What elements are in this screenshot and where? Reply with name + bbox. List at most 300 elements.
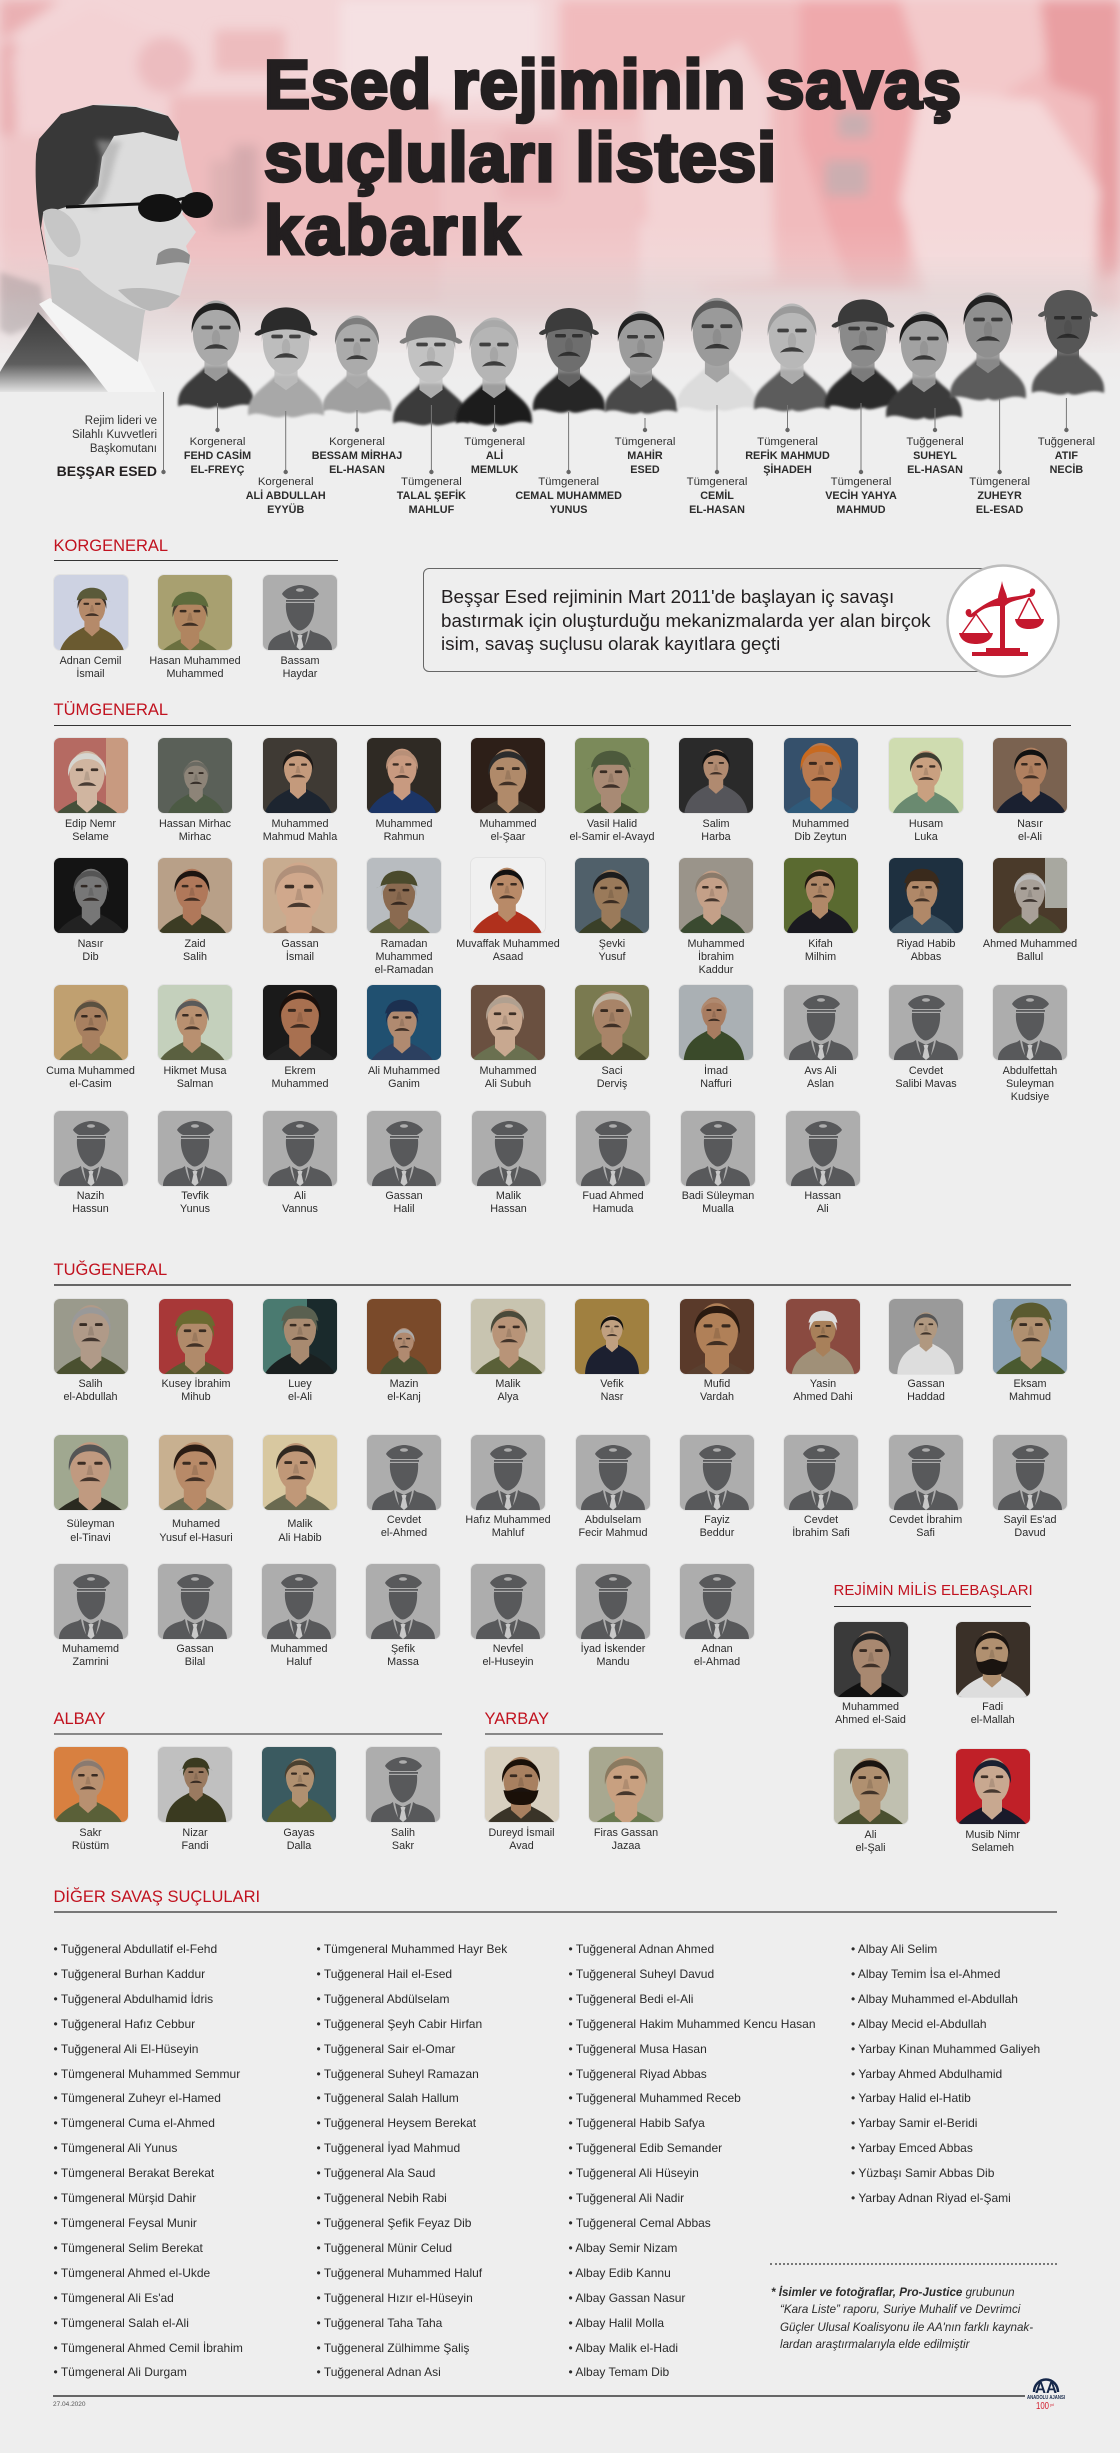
label: Cemil el-Hasan: EL-HASAN [689, 504, 745, 516]
list column 2: • Tuğgeneral Suheyl Ramazan [316, 2067, 479, 2081]
card: Firas Gassan Jazaa [589, 1747, 663, 1822]
card: Fayiz Beddur [680, 1434, 754, 1510]
text: Salih [183, 951, 207, 963]
list column 4: • Albay Ali Selim [851, 1942, 937, 1956]
card: Muhamed Yusuf el-Hasuri [159, 1434, 233, 1510]
list column 1: • Tümgeneral Berakat Berekat [54, 2166, 214, 2180]
list column 3: • Albay Edib Kannu [568, 2266, 671, 2280]
icon: scales of justice [946, 564, 1060, 678]
list column 4: • Albay Temim İsa el-Ahmed [851, 1967, 1000, 1981]
list column 2: • Tuğgeneral Abdülselam [316, 1992, 449, 2006]
list column 2: • Tuğgeneral Hail el-Esed [316, 1967, 452, 1981]
list column 1: • Tümgeneral Ali Durgam [54, 2365, 187, 2379]
list column 3: • Albay Gassan Nasur [568, 2291, 685, 2305]
text: Yusuf [598, 951, 626, 963]
text: Ekrem [284, 1064, 316, 1076]
text: Muvaffak Muhammed [456, 938, 560, 950]
label: Mahir Esed: Tümgeneral [615, 436, 675, 448]
card: Gayas Dalla [262, 1747, 336, 1822]
text: Şefik [391, 1643, 415, 1655]
label: Suheyl el-Hasan: Tuğgeneral [906, 436, 964, 448]
heading: Diğer savaş suçluları: DİĞER SAVAŞ SUÇLULARI [54, 1888, 260, 1906]
card: Muhammed Rahmun [366, 737, 442, 843]
text: Asaad [493, 951, 523, 963]
list column 4: • Albay Muhammed el-Abdullah [851, 1992, 1018, 2006]
text: Ali [294, 1190, 306, 1202]
label: Vecih Yahya Mahmud: MAHMUD [836, 504, 886, 516]
text: Avad [509, 1840, 534, 1852]
text: Sayil Es'ad [1003, 1514, 1057, 1526]
text: Safi [916, 1527, 935, 1539]
text: Muhammed [270, 1643, 328, 1655]
card: Nasır el-Ali [992, 737, 1068, 843]
text: Luka [914, 831, 938, 843]
label: Ali Abdullah Eyyüb [246, 476, 326, 516]
heading: Rejimin milis elebaşları: REJİMİN MİLİS ELEBAŞLARI [834, 1582, 1033, 1599]
text: Massa [387, 1656, 419, 1668]
label: Talal Şefik Mahluf: TALAL ŞEFİK [397, 490, 466, 502]
text: Haddad [907, 1391, 945, 1403]
list column 2: • Tuğgeneral Nebih Rabi [316, 2191, 447, 2205]
list column 2: • Tuğgeneral Münir Celud [316, 2241, 452, 2255]
card: Gassan Halil [367, 1110, 441, 1186]
text: Mirhac [179, 831, 211, 843]
text: Salibi Mavas [895, 1078, 957, 1090]
text: Fuad Ahmed [582, 1190, 644, 1202]
card: Fadi el-Mallah [956, 1622, 1030, 1696]
text: Malik [496, 1190, 521, 1202]
text: Muhammed [792, 818, 849, 830]
heading: Korgeneral: KORGENERAL [54, 537, 168, 555]
text: el-Ahmad [694, 1656, 740, 1668]
text: Kusey İbrahim [161, 1378, 230, 1390]
label: Cemal Muhammed Yunus [515, 476, 622, 516]
text: Sakr [79, 1826, 102, 1838]
text: Gassan [385, 1190, 423, 1202]
text: Abbas [911, 951, 941, 963]
list column 3: • Tuğgeneral Adnan Ahmed [568, 1942, 714, 1956]
label: Mahir Esed: ESED [630, 464, 660, 476]
text: İbrahim Safi [792, 1527, 850, 1539]
bust: Fehd Casim el-Freyc [178, 298, 254, 408]
card: Salim Harba [678, 737, 754, 843]
list column 3: • Tuğgeneral Ali Hüseyin [568, 2166, 699, 2180]
text: Abdulselam [585, 1514, 641, 1526]
card: Adnan el-Ahmad [680, 1564, 754, 1638]
list column 2: • Tuğgeneral Muhammed Haluf [316, 2266, 482, 2280]
text: Ali Subuh [485, 1078, 531, 1090]
text: İbrahim [698, 951, 734, 963]
card: Ramadan Muhammed el-Ramadan [366, 857, 442, 976]
text: Muhamed [172, 1518, 220, 1530]
card: Süleyman el-Tinavi [54, 1434, 128, 1510]
card: Malik Alya [471, 1298, 545, 1374]
card: Sakr Rüstüm [54, 1747, 128, 1822]
text: Adnan [701, 1643, 733, 1655]
card: Vefik Nasr [575, 1298, 649, 1374]
text: Aslan [807, 1078, 834, 1090]
list column 2: • Tuğgeneral Zülhimme Şaliş [316, 2340, 469, 2354]
list column 1: • Tuğgeneral Abdullatif el-Fehd [54, 1942, 217, 1956]
label: Refik Mahmud Şihadeh [745, 436, 830, 476]
text: el-Casim [69, 1078, 112, 1090]
portrait: Beşşar Esed [0, 104, 213, 392]
label: Ali Memluk [464, 436, 525, 476]
label: Talal Şefik Mahluf: MAHLUF [409, 504, 454, 516]
text: Nazih [77, 1190, 104, 1202]
text: Ballul [1017, 951, 1043, 963]
text: İsmail [76, 668, 105, 680]
text: Beddur [700, 1527, 734, 1539]
card: Bassam Haydar [262, 574, 338, 680]
label: Zuheyr el-Esad: ZUHEYR [977, 490, 1022, 502]
source note: “Kara Liste” raporu, Suriye Muhalif ve Devrimci [780, 2303, 1020, 2316]
text: Fecir Mahmud [578, 1527, 648, 1539]
text: Mufid [704, 1378, 730, 1390]
list column 1: • Tümgeneral Cuma el-Ahmed [54, 2116, 215, 2130]
text: el-Kanj [387, 1391, 421, 1403]
list column 4 [851, 1937, 1040, 2211]
card: Hassan Ali [786, 1110, 860, 1186]
card: Avs Ali Aslan [784, 985, 858, 1060]
card: Cuma Muhammed el-Casim [54, 985, 128, 1060]
text: Yunus [180, 1203, 210, 1215]
text: Husam [909, 818, 943, 830]
text: Firas Gassan [594, 1826, 658, 1838]
text: Muhammed [479, 1064, 536, 1076]
text: Ali [817, 1203, 829, 1215]
text: Saci [601, 1064, 622, 1076]
text: Hassun [72, 1203, 109, 1215]
text: Hassan Mirhac [159, 818, 231, 830]
list column 1: • Tuğgeneral Ali El-Hüseyin [54, 2042, 198, 2056]
text: Gassan [907, 1378, 945, 1390]
source note: Güçler Ulusal Koalisyonu ile AA'nın farklı kaynak- [780, 2321, 1033, 2334]
list column 3: • Tuğgeneral Musa Hasan [568, 2042, 707, 2056]
list column 3: • Tuğgeneral Edib Semander [568, 2141, 722, 2155]
list column 3: • Tuğgeneral Muhammed Receb [568, 2091, 741, 2105]
label: Suheyl el-Hasan: SUHEYL [913, 450, 957, 462]
title [264, 46, 962, 269]
list column 2: • Tuğgeneral Salah Hallum [316, 2091, 459, 2105]
label: Atıf Necib: Tuğgeneral [1038, 436, 1095, 448]
card: Malik Ali Habib [263, 1434, 337, 1510]
card: Muhammed Haluf [262, 1564, 336, 1638]
text: Nizar [182, 1826, 208, 1838]
list column 2: • Tuğgeneral Şefik Feyaz Dib [316, 2216, 471, 2230]
text: el-Ahmed [381, 1527, 427, 1539]
list column 3: • Albay Halil Molla [568, 2316, 664, 2330]
text: Ali Habib [278, 1532, 322, 1544]
card: Sayil Es'ad Davud [993, 1434, 1067, 1510]
bust: Bessam Mirhaj el-Hasan [323, 314, 391, 413]
card: Salih Sakr [366, 1747, 440, 1822]
text: el-Huseyin [482, 1656, 534, 1668]
card: Nazih Hassun [54, 1110, 128, 1186]
text: el-Ali [1018, 831, 1042, 843]
list column 4: • Yarbay Halid el-Hatib [851, 2091, 971, 2105]
list column 3: • Tuğgeneral Bedi el-Ali [568, 1992, 693, 2006]
list column 3: • Tuğgeneral Suheyl Davud [568, 1967, 714, 1981]
list column 3: • Tuğgeneral Hakim Muhammed Kencu Hasan [568, 2017, 816, 2031]
card: Nevfel el-Huseyin [471, 1564, 545, 1638]
label: Bessam Mirhaj el-Hasan: EL-HASAN [329, 464, 385, 476]
bust: Suheyl el-Hasan [886, 309, 962, 419]
text: Dalla [287, 1840, 311, 1852]
text: Dib [82, 951, 99, 963]
list column 2: • Tuğgeneral Ala Saud [316, 2166, 435, 2180]
text: el-Ali [288, 1391, 312, 1403]
bust: Cemal Muhammed Yunus [533, 308, 605, 413]
card: Şevki Yusuf [574, 857, 650, 963]
text: Muhamemd [62, 1643, 119, 1655]
callout text [441, 586, 931, 654]
text: Derviş [597, 1078, 627, 1090]
card: Saci Derviş [575, 985, 649, 1060]
label: Cemil el-Hasan [686, 476, 747, 516]
text: el-Şali [855, 1842, 886, 1854]
card: Muhammed el-Şaar [470, 737, 546, 843]
list column 4: • Yarbay Samir el-Beridi [851, 2116, 977, 2130]
card: Muvaffak Muhammed Asaad [456, 857, 560, 963]
label: Zuheyr el-Esad: Tümgeneral [969, 476, 1030, 488]
heading: Yarbay: YARBAY [484, 1710, 549, 1728]
card: Tevfik Yunus [158, 1110, 232, 1186]
text: Cevdet [387, 1514, 421, 1526]
list column 3: • Tuğgeneral Riyad Abbas [568, 2067, 707, 2081]
text: Badi Süleyman [682, 1190, 754, 1202]
text: Muhammed [166, 668, 224, 680]
text: İsmail [286, 951, 314, 963]
list column 1: • Tümgeneral Ahmed Cemil İbrahim [54, 2340, 243, 2354]
card: Musib Nimr Selameh [956, 1749, 1030, 1824]
text: Dib Zeytun [794, 831, 847, 843]
source note: lardan araştırmalarıyla elde edilmiştir [780, 2338, 969, 2351]
label: Mahir Esed: MAHİR [627, 450, 663, 462]
card: Ali el-Şali [834, 1749, 908, 1824]
label: Vecih Yahya Mahmud: Tümgeneral [831, 476, 891, 488]
text: Cuma Muhammed [46, 1064, 135, 1076]
text: Halil [394, 1203, 414, 1215]
text: Mandu [596, 1656, 630, 1668]
text: Yusuf el-Hasuri [159, 1532, 233, 1544]
text: Fadi [982, 1701, 1003, 1713]
text: Mahmud Mahla [263, 831, 337, 843]
text: Abdulfettah [1003, 1064, 1057, 1076]
label: Vecih Yahya Mahmud: VECİH YAHYA [825, 490, 897, 502]
text: Hassan [490, 1203, 527, 1215]
text: el-Mallah [971, 1714, 1015, 1726]
text: Luey [288, 1378, 312, 1390]
card: İyad İskender Mandu [576, 1564, 650, 1638]
label: Ali Memluk: MEMLUK [471, 464, 518, 476]
text: Mihub [181, 1391, 211, 1403]
label: Beşşar Esed: Rejim lideri ve [85, 415, 157, 427]
card: Hikmet Musa Salman [158, 985, 232, 1060]
label: Bessam Mirhaj el-Hasan: BESSAM MİRHAJ [312, 450, 402, 462]
text: Şevki [599, 938, 625, 950]
text: İyad İskender [581, 1643, 645, 1655]
card: Ali Muhammed Ganim [367, 985, 441, 1060]
heading: Albay: ALBAY [54, 1710, 105, 1728]
list column 1: • Tümgeneral Mürşid Dahir [54, 2191, 196, 2205]
text: el-Ramadan [375, 964, 433, 976]
label: Ali Abdullah Eyyüb: Korgeneral [258, 476, 314, 488]
card: Muhammed İbrahim Kaddur [679, 858, 753, 933]
text: Suleyman [1006, 1078, 1054, 1090]
text: Muhammed [375, 951, 432, 963]
list column 3: • Albay Temam Dib [568, 2365, 669, 2379]
text: Muhammed [687, 938, 744, 950]
text: Rüstüm [72, 1840, 109, 1852]
card: Ahmed Muhammed Ballul [993, 858, 1067, 933]
card: Mufid Vardah [680, 1298, 754, 1374]
text: Fandi [181, 1840, 208, 1852]
text: Ahmed Dahi [793, 1391, 853, 1403]
card: Cevdet el-Ahmed [367, 1434, 441, 1510]
label: Refik Mahmud Şihadeh: REFİK MAHMUD [745, 450, 830, 462]
callout text: bastırmak için oluşturduğu mekanizmalarda yer alan birçok [441, 610, 931, 631]
label: Mahir Esed [614, 436, 675, 476]
text: Hamuda [593, 1203, 633, 1215]
text: Selameh [971, 1842, 1014, 1854]
text: Mualla [702, 1203, 734, 1215]
card: Dureyd İsmail Avad [484, 1747, 558, 1822]
text: Selame [72, 831, 109, 843]
date: 27.04.2020 [53, 2401, 86, 2408]
bust: Cemil el-Hasan [677, 296, 757, 411]
label: Ali Abdullah Eyyüb: EYYÜB [267, 504, 304, 516]
label: Cemil el-Hasan: CEMİL [700, 490, 734, 502]
card: Gassan İsmail [262, 857, 338, 963]
text: Yasin [810, 1378, 836, 1390]
label: Cemal Muhammed Yunus: Tümgeneral [538, 476, 599, 488]
list column 4: • Yarbay Ahmed Abdulhamid [851, 2067, 1002, 2081]
text: Ahmed el-Said [835, 1714, 906, 1726]
label: Bessam Mirhaj el-Hasan: Korgeneral [329, 436, 385, 448]
list column 2: • Tuğgeneral İyad Mahmud [316, 2141, 460, 2155]
list column 3: • Albay Malik el-Hadi [568, 2340, 678, 2354]
label: Fehd Casim el-Freyc: FEHD CASİM [184, 450, 251, 462]
text: Davud [1014, 1527, 1046, 1539]
label: Cemal Muhammed Yunus: YUNUS [550, 504, 587, 516]
list column 3: • Tuğgeneral Cemal Abbas [568, 2216, 711, 2230]
list column 2: • Tümgeneral Muhammed Hayr Bek [316, 1942, 507, 1956]
label: Ali Memluk: Tümgeneral [464, 436, 525, 448]
text: Fayiz [704, 1514, 730, 1526]
card: Gassan Bilal [158, 1564, 232, 1638]
bust: Vecih Yahya Mahmud [825, 299, 901, 409]
label: Ali Abdullah Eyyüb: ALİ ABDULLAH [246, 490, 326, 502]
card: Cevdet İbrahim Safi [784, 1434, 858, 1510]
callout box [423, 568, 993, 672]
text: Vardah [700, 1391, 734, 1403]
text: Ahmed Muhammed [983, 938, 1077, 950]
list column 3: • Albay Semir Nizam [568, 2241, 677, 2255]
text: Hassan [804, 1190, 841, 1202]
card: Nasır Dib [53, 857, 129, 963]
list column 1: • Tümgeneral Muhammed Semmur [54, 2067, 240, 2081]
text: Kudsiye [1011, 1091, 1049, 1103]
text: Muhammed [271, 1078, 328, 1090]
text: el-Tinavi [70, 1532, 111, 1544]
card: Badi Süleyman Mualla [681, 1110, 755, 1186]
list column 2 [316, 1937, 507, 2385]
text: Hikmet Musa [164, 1064, 226, 1076]
text: Muhammed [842, 1701, 899, 1713]
list column 2: • Tuğgeneral Adnan Asi [316, 2365, 441, 2379]
card: Salih el-Abdullah [54, 1298, 128, 1374]
label: Talal Şefik Mahluf: Tümgeneral [401, 476, 462, 488]
list column 2: • Tuğgeneral Sair el-Omar [316, 2042, 455, 2056]
text: Ali [864, 1828, 876, 1840]
label: Fehd Casim el-Freyc [184, 436, 251, 476]
text: Zaid [184, 938, 206, 950]
card: Cevdet İbrahim Safi [889, 1434, 963, 1510]
text: Muhammed [271, 818, 328, 830]
list column 4: • Yarbay Kinan Muhammed Galiyeh [851, 2042, 1040, 2056]
card: Ali Vannus [263, 1110, 337, 1186]
text: Cevdet İbrahim [889, 1514, 962, 1526]
text: Alya [497, 1391, 518, 1403]
card: Nizar Fandi [158, 1747, 232, 1822]
text: Muhammed [479, 818, 536, 830]
label: Ali Memluk: ALİ [486, 450, 503, 462]
label: Cemil el-Hasan: Tümgeneral [687, 476, 747, 488]
card: Şefik Massa [366, 1564, 440, 1638]
text: Mahluf [492, 1527, 524, 1539]
leader lines with dots [161, 392, 1069, 474]
label: Refik Mahmud Şihadeh: Tümgeneral [757, 436, 818, 448]
text: Bassam [280, 654, 320, 666]
title: suçluları listesi [264, 119, 777, 196]
text: Vannus [282, 1203, 318, 1215]
card: Muhammed Ali Subuh [471, 985, 545, 1060]
text: Cevdet [804, 1514, 838, 1526]
text: İmad [704, 1064, 728, 1076]
bust: Zuheyr el-Esad [950, 290, 1026, 400]
bust: Atıf Necib silhouette [1032, 290, 1104, 395]
card: Cevdet Salibi Mavas [889, 985, 963, 1060]
text: Ali Muhammed [368, 1064, 440, 1076]
label: Beşşar Esed: Başkomutanı [90, 443, 157, 455]
source note [770, 2263, 1057, 2354]
text: Ramadan [381, 938, 427, 950]
list column 3: • Tuğgeneral Habib Safya [568, 2116, 705, 2130]
list column 3: • Tuğgeneral Ali Nadir [568, 2191, 684, 2205]
list column 1: • Tuğgeneral Burhan Kaddur [54, 1967, 205, 1981]
title: kabarık [264, 192, 522, 269]
text: Vasil Halid [587, 818, 637, 830]
text: Salman [177, 1078, 213, 1090]
card: Zaid Salih [157, 857, 233, 963]
card: Hasan Muhammed Muhammed [149, 574, 241, 680]
hero illustration: ruins background, portraits and leader lines [0, 0, 1120, 474]
label: Atıf Necib [1038, 436, 1095, 476]
label: Beşşar Esed [57, 415, 157, 479]
label: Fehd Casim el-Freyc: EL-FREYÇ [190, 464, 244, 476]
logo: Anadolu Ajansı: 100 [1036, 2401, 1049, 2412]
label: Zuheyr el-Esad: EL-ESAD [976, 504, 1023, 516]
card: Muhammed Ahmed el-Said [834, 1622, 908, 1696]
text: Sakr [392, 1840, 414, 1852]
card: Abdulselam Fecir Mahmud [576, 1434, 650, 1510]
card: Muhammed Dib Zeytun [783, 737, 859, 843]
label: Cemal Muhammed Yunus: CEMAL MUHAMMED [515, 490, 622, 502]
label: Fehd Casim el-Freyc: Korgeneral [190, 436, 245, 448]
text: Tevfik [181, 1190, 209, 1202]
text: Harba [701, 831, 731, 843]
